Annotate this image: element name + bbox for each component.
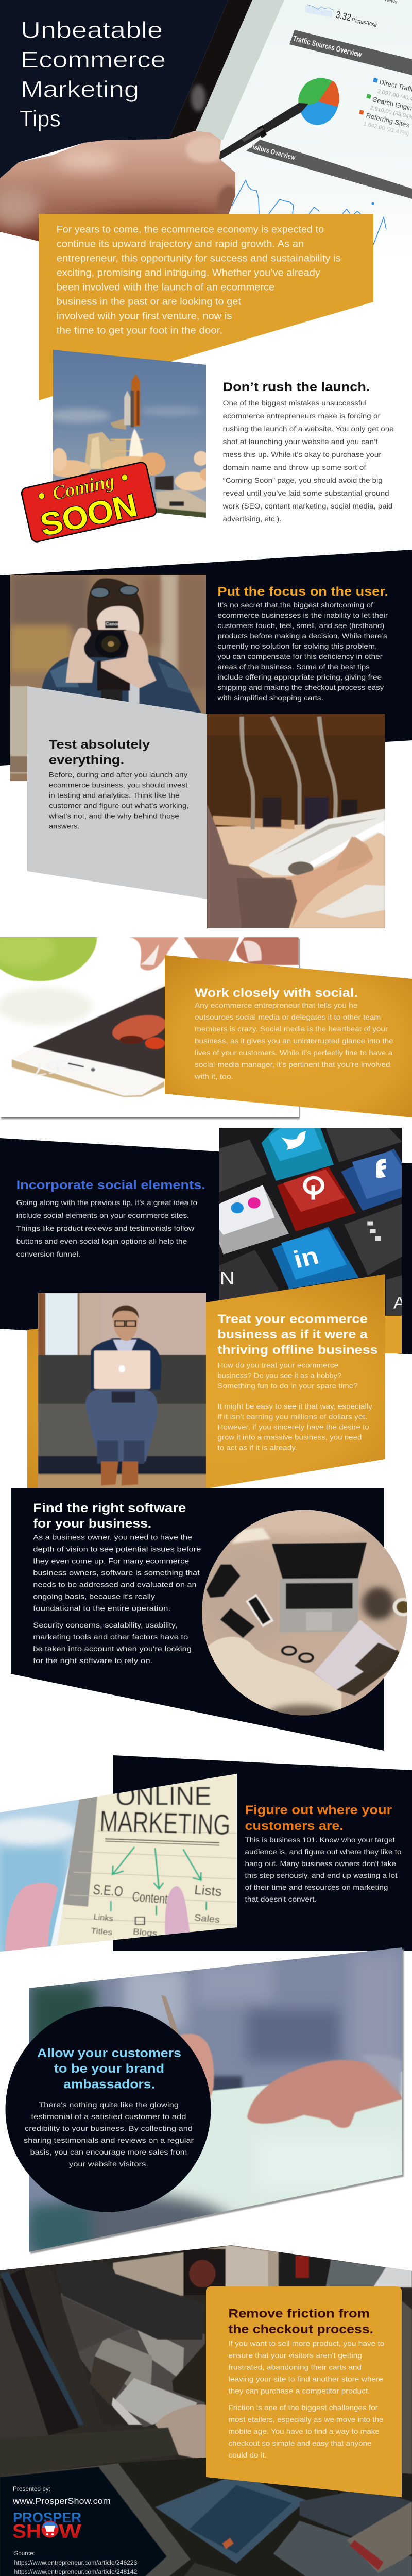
body text: Any ecommerce entrepreneur that tells you he (195, 1001, 358, 1009)
body text: marketing tools and other factors have to (33, 1633, 188, 1641)
body text: with simplified shopping carts. (217, 693, 323, 702)
hands (66, 628, 95, 683)
body text: business? Do you see it as a hobby? (217, 1371, 341, 1380)
sleeve and arm (207, 805, 287, 928)
heading: business as if it were a (217, 1328, 368, 1342)
body text: rushing the launch of a website. You only get one (223, 425, 394, 433)
body text: ensure that your visitors aren't getting (228, 2351, 362, 2359)
body text: Things like product reviews and testimonials follow (16, 1224, 195, 1232)
table (207, 822, 385, 928)
handwriting labels: Links (93, 1912, 114, 1923)
handwriting heading: MARKETING (99, 1805, 231, 1841)
heading: Remove friction from (228, 2307, 370, 2320)
body text: in testing and analytics. Think like the (49, 791, 180, 800)
body text: social-media manager, it’s pertinent that you’re involved (195, 1060, 390, 1069)
heading: Treat your ecommerce (217, 1312, 368, 1326)
phone body (13, 981, 168, 1095)
dark panel: where customers are (113, 1755, 412, 1951)
body text: if it isn't earning you millions of dollars yet. (217, 1413, 367, 1421)
body text: this step seriously, and end up wasting a lot (245, 1871, 398, 1879)
heading: for your business. (33, 1517, 151, 1531)
laptop (94, 1350, 150, 1389)
key: pinterest (277, 1166, 356, 1231)
fingers (129, 937, 179, 971)
body text (24, 2100, 194, 2168)
writing hand photo (29, 1942, 407, 2267)
dotted grey key glyph (367, 1222, 381, 1241)
gold strip behind keyboard (385, 1316, 402, 1353)
handwriting labels: Blogs (132, 1927, 158, 1938)
body text (222, 399, 394, 523)
tablet screen (216, 0, 412, 258)
body text: audience is, and figure out where they like to (245, 1848, 402, 1856)
body text: conversion funnel. (16, 1250, 80, 1258)
key: linkedin: in (290, 1242, 322, 1274)
phones (246, 1594, 274, 1627)
exhaust clouds (48, 460, 91, 478)
heading (49, 738, 150, 767)
handwriting labels: Sales (194, 1913, 220, 1925)
body text: shipping and making the checkout process easy (217, 683, 384, 691)
intro text: business in the past or are looking to get (57, 296, 241, 308)
body text (217, 601, 388, 702)
body text (245, 1836, 402, 1903)
body text: domain name and throw up some sort of (223, 463, 366, 471)
icon: cart badge (41, 2520, 59, 2538)
title: Unbeatable (21, 18, 163, 43)
camera photo (10, 574, 208, 781)
logo: prosper show (12, 2510, 81, 2543)
shadow of phone photo (1, 939, 300, 1119)
body text (194, 1001, 393, 1080)
title background shape (0, 0, 228, 178)
heading: ambassadors. (63, 2078, 155, 2092)
intro text: entrepreneur, this opportunity for success and sustainability is (57, 253, 341, 264)
intro panel (39, 214, 373, 400)
heading: Incorporate social elements. (16, 1178, 205, 1192)
body text: Something fun to do in your spare time? (217, 1382, 358, 1390)
launch pad (155, 476, 174, 490)
logo: prosper show: PROSPER (13, 2510, 81, 2526)
heading: Find the right software (33, 1501, 186, 1515)
heading: Allow your customers (37, 2046, 181, 2060)
holding hand (5, 1883, 58, 1953)
tip: put the focus on the user (217, 585, 388, 702)
dark circle (5, 2006, 211, 2212)
body text: Going along with the previous tip, it’s a great idea to (16, 1198, 197, 1207)
dark band: user focus (0, 550, 412, 766)
phone and apple photo (0, 937, 299, 1117)
body text: with it, too. (194, 1072, 233, 1080)
heading: to be your brand (54, 2062, 164, 2076)
tablet toolbar (63, 1792, 98, 1907)
pie chart (295, 74, 344, 129)
body text: products before making a decision. While there’s (217, 632, 387, 640)
body text: include offering appropriate pricing, giving free (217, 673, 382, 681)
handwriting labels: Lists (194, 1882, 222, 1899)
jeans (85, 1389, 158, 1462)
intro text: involved with your first venture, now is (57, 311, 232, 322)
visitors overview header band: Visitors Overview (248, 141, 296, 162)
grey keys (219, 1140, 267, 1192)
heading: Work closely with social. (195, 986, 358, 1000)
banknote stacks (273, 2488, 412, 2576)
heading: customers are. (245, 1819, 344, 1833)
gold background (27, 1274, 385, 1488)
heading: thriving offline business (217, 1343, 378, 1357)
heading: Don’t rush the launch. (223, 380, 370, 394)
sunglasses (91, 586, 138, 598)
body text: to act as if it is already. (217, 1444, 297, 1452)
phone screen (33, 985, 168, 1080)
blanket (205, 1637, 341, 1716)
coming soon sign (21, 461, 158, 546)
man (85, 1306, 162, 1485)
body text: buttons and even social login options all help the (16, 1237, 187, 1245)
body text: business owners, software is something that (33, 1568, 200, 1577)
body text (48, 771, 189, 831)
footer: presented by: www.ProsperShow.com (12, 2497, 111, 2506)
body text: mess this up. While it’s okay to purchase your (223, 450, 382, 459)
body text (33, 1533, 201, 1665)
tip: figure out where your customers are (245, 1803, 402, 1903)
green arrows (111, 1847, 207, 1915)
key: linkedin (272, 1227, 358, 1289)
heading (228, 2307, 373, 2336)
line chart (232, 180, 386, 245)
footer: presented by (12, 2486, 111, 2506)
heading: Put the focus on the user. (217, 585, 388, 599)
heading (37, 2046, 181, 2092)
handwriting labels: Titles (91, 1926, 113, 1937)
tablet screen (0, 2467, 167, 2576)
tablet light bezel (195, 0, 284, 140)
tablet bezel (0, 2463, 191, 2576)
launch tower (84, 432, 126, 471)
offline business panel (27, 1274, 385, 1490)
logo: prosper show: W (59, 2521, 81, 2543)
body text: How do you treat your ecommerce (217, 1361, 338, 1369)
handwriting labels (91, 1882, 222, 1938)
records (60, 2293, 205, 2428)
lower strip (10, 686, 29, 773)
intro text (57, 224, 341, 336)
coming soon sign: Coming (50, 470, 116, 504)
body text: work (SEO, content marketing, social media, paid (222, 502, 392, 510)
body text: could do it. (228, 2451, 267, 2459)
tip: brand ambassadors circle (5, 2006, 211, 2212)
online marketing tablet photo (0, 1764, 242, 1958)
open book (248, 809, 385, 875)
tip: work closely with social (165, 955, 412, 1117)
sleeve right (55, 2262, 205, 2340)
body text: outsources social media or delegates it to other team (195, 1013, 381, 1021)
legend (359, 78, 412, 137)
handwriting labels: Content (132, 1889, 168, 1907)
pen (215, 103, 308, 162)
body text: This is business 101. Know who your target (245, 1836, 395, 1844)
hand holding pen (0, 129, 242, 247)
body text: ongoing basis, because it's really (33, 1592, 155, 1600)
body text (16, 1198, 197, 1258)
exhaust flame (129, 429, 143, 460)
jacket (42, 655, 202, 715)
handwriting labels: S.E.O (92, 1882, 124, 1900)
heading: Figure out where your (245, 1803, 392, 1817)
body text: “Coming Soon” page, you should avoid the big (223, 476, 383, 484)
body text: areas of the business. Some of the best tips (217, 663, 370, 671)
sleeve and gripping hand (175, 2034, 214, 2123)
dimmed laptop and calculator photo (0, 2452, 412, 2576)
handwriting heading: ONLINE (115, 1781, 212, 1811)
body text: business, as it gives you an uninterrupted glance into the (195, 1037, 393, 1045)
camera photo: Canon (106, 622, 121, 626)
key: facebook (341, 1148, 402, 1211)
tip: incorporate social elements (16, 1178, 205, 1258)
tablet dark bezel (168, 0, 252, 140)
body text: include social elements on your ecommerce sites. (16, 1211, 189, 1219)
body text: hang out. Many business owners don't take (245, 1859, 396, 1868)
body text: If you want to sell more product, you have to (228, 2339, 385, 2347)
hero: tablet photo (168, 0, 412, 258)
lamp stems (242, 717, 336, 829)
gold background (39, 214, 373, 400)
magazine (314, 1620, 397, 1692)
body text: that doesn't convert. (245, 1895, 317, 1903)
body text: your website visitors. (69, 2160, 148, 2168)
body text: shot at launching your website and you can’t (223, 437, 378, 446)
body text: Before, during and after you launch any (49, 771, 187, 779)
legend: Referring Sites (365, 111, 410, 129)
keyboard photo: A (393, 1295, 406, 1312)
tip: don't rush the launch (222, 380, 394, 523)
body text: of their time and resources on marketing (245, 1883, 388, 1891)
body text: reveal until you’ve laid some substantial ground (223, 489, 389, 497)
dark band: social elements (0, 1138, 412, 1354)
tip: test absolutely everything (27, 686, 207, 899)
apple (0, 889, 97, 981)
heading: the checkout process. (228, 2323, 373, 2336)
body text (217, 1361, 372, 1452)
pointing finger (165, 1886, 191, 1937)
body text: basis, you can encourage more sales from (30, 2148, 187, 2156)
body text: answers. (49, 822, 80, 831)
body text: As a business owner, you need to have the (33, 1533, 192, 1541)
body text: frustrated, abandoning their carts and (228, 2363, 362, 2371)
paper (29, 2071, 407, 2267)
shuttle (131, 374, 140, 426)
body text: customers touch, feel, smell, and see (firsthand) (217, 621, 384, 630)
pen (161, 1995, 181, 2043)
laptop screen (272, 1543, 367, 1579)
mug (393, 1598, 412, 1616)
grey panel (27, 686, 207, 899)
body text: needs to be addressed and evaluated on an (33, 1580, 197, 1588)
record crate photo (0, 2241, 412, 2483)
dark panel (11, 1488, 384, 1751)
camera (207, 1565, 241, 1598)
gold background (206, 2286, 402, 2497)
heading (245, 1803, 392, 1833)
camera (84, 630, 129, 657)
intro text: continue its upward trajectory and rapid growth. As an (57, 239, 304, 250)
heading: Test absolutely (49, 738, 150, 752)
traffic sources header band: Traffic Sources Overview (292, 34, 363, 59)
keyboard photo: N (220, 1268, 235, 1289)
body text: advertising, etc.). (223, 515, 281, 523)
body text: they can purchase a competitor product. (228, 2386, 370, 2395)
title: Ecommerce (21, 47, 166, 73)
stat: pages per visit: 3.32 (335, 9, 352, 24)
body text: There's nothing quite like the glowing (39, 2100, 179, 2109)
rocket photo (53, 350, 206, 518)
body text: leaving your site to find another store where (228, 2375, 383, 2383)
body text: One of the biggest mistakes unsuccessful (223, 399, 367, 407)
shadow of writing photo (30, 1949, 404, 2254)
desk flat-lay photo circle (201, 1502, 412, 1723)
body text: they even come up. For many ecommerce (33, 1556, 190, 1565)
book photo (207, 712, 388, 928)
body text: currently no solution for solving this problem, (217, 642, 377, 650)
glasses (282, 1647, 313, 1662)
body text: sharing testimonials and reviews on a regular (24, 2136, 194, 2144)
body text: credibility to your business. By collecting and (25, 2124, 193, 2132)
laptop base (280, 1578, 358, 1633)
body text: depth of vision to see potential issues before (33, 1545, 201, 1553)
couch (38, 1355, 207, 1456)
body text: you can compensate for this deficiency in other (217, 652, 383, 660)
body text: testimonial of a satisfied customer to add (31, 2112, 186, 2121)
legend: 1,642.00 (21.47%) (363, 121, 409, 137)
body text: grow it into a massive business, you need (217, 1433, 362, 1442)
key: flickr (219, 1185, 289, 1255)
title: Marketing (21, 77, 139, 102)
logo: prosper show: SH (12, 2521, 41, 2543)
traffic sources header band (289, 30, 412, 75)
laptop corner (171, 2563, 263, 2576)
footer: presented by: Presented by: (13, 2486, 50, 2493)
body text: ecommerce businesses is the inability to let their (217, 611, 388, 619)
back wall (113, 2245, 279, 2296)
intro text: the time to get your foot in the door. (57, 325, 222, 336)
key: twitter (262, 1128, 334, 1181)
face (96, 605, 140, 634)
gold panel (165, 955, 412, 1117)
wallpaper flower (109, 1010, 169, 1049)
title (20, 18, 166, 132)
intro text: exciting, promising and intriguing. Whether you’ve already (57, 267, 320, 279)
jacket body (0, 2267, 179, 2477)
heading (33, 1501, 186, 1531)
gold panel: remove friction (206, 2286, 402, 2497)
stat: pages per visit (335, 9, 378, 29)
shoes (101, 1462, 118, 1485)
body text: Friction is one of the biggest challenges for (228, 2403, 378, 2412)
tip: find the right software (11, 1488, 412, 1751)
body text: members is crazy. Social media is the heartbeat of your (195, 1025, 388, 1033)
body text: for the right software to rely on. (33, 1656, 152, 1665)
footer: sources: https://www.entrepreneur.com/article/248142 (14, 2569, 137, 2575)
handwriting heading (99, 1781, 231, 1841)
tablet screen paper (57, 1764, 236, 1947)
body text: ecommerce entrepreneurs make is forcing or (223, 412, 381, 420)
body text: foundational to the entire operation. (33, 1604, 170, 1612)
heading: everything. (49, 753, 124, 767)
body text: mobile age. You have to find a way to make (228, 2427, 380, 2435)
intro text: For years to come, the ecommerce economy is expected to (57, 224, 324, 235)
footer: sources: https://www.entrepreneur.com/article/246223 (14, 2560, 137, 2566)
lock screen clock: 9:57 (30, 1054, 83, 1079)
body text: ecommerce business, you should invest (49, 781, 187, 789)
body text (228, 2339, 385, 2459)
footer: sources (14, 2551, 137, 2576)
calculator (155, 2474, 306, 2564)
visitors overview header band (246, 140, 412, 199)
body text: However, if you sincerely have the desire to (217, 1423, 369, 1431)
footer: sources: Source: (14, 2551, 35, 2557)
sparkline (305, 5, 334, 18)
hair (87, 579, 144, 634)
heading (217, 1312, 378, 1357)
title: Tips (20, 106, 61, 132)
coming soon sign: SOON (37, 487, 140, 543)
tablet edge (50, 1764, 239, 1951)
keyboard photo (219, 1128, 406, 1316)
body text: what’s not, and the why behind those (48, 812, 179, 820)
stat: pages per visit: Pages/Visit (351, 16, 377, 28)
intro text: been involved with the launch of an ecommerce (57, 282, 274, 293)
man with laptop photo (38, 1293, 207, 1490)
body text: It might be easy to see it that way, especially (217, 1402, 372, 1411)
body text: be taken into account when you're looking (33, 1645, 192, 1653)
second book (315, 885, 385, 918)
body text: most etailers, especially as we move into the (228, 2415, 384, 2424)
writing hand (247, 2060, 402, 2128)
body text: lives of your customers. While it’s perfectly fine to have a (195, 1048, 392, 1057)
body text: customer and figure out what’s working, (49, 802, 189, 810)
body text: It’s no secret that the biggest shortcoming of (217, 601, 373, 609)
body text: Security concerns, scalability, usability, (33, 1621, 177, 1629)
body text: checkout so simple and easy that anyone (228, 2439, 372, 2447)
